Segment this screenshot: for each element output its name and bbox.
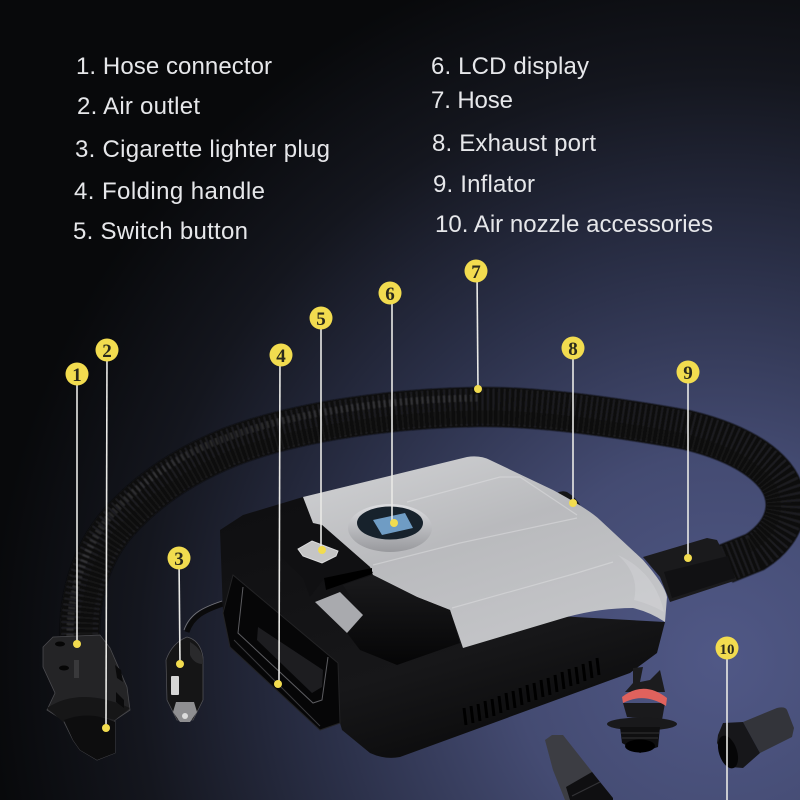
callout 8: exhaust port: 8: [568, 339, 578, 360]
callout 10: air nozzle accessories: [716, 636, 738, 800]
label 7: 7. Hose: [431, 87, 513, 114]
parts list: left column: [73, 53, 330, 245]
callout 7: hose: [464, 260, 488, 393]
label 4: 4. Folding handle: [74, 178, 265, 205]
callout 5: switch button: [310, 306, 332, 554]
accessory: tapered adapter: [714, 707, 794, 771]
silver top shell: [303, 456, 667, 648]
label 6: 6. LCD display: [431, 53, 589, 80]
black casing: [220, 497, 665, 758]
callout 3: cigarette plug: [168, 546, 190, 668]
exhaust port: [557, 491, 583, 518]
vent slots: [464, 658, 599, 725]
callout 8: exhaust port: [562, 336, 584, 507]
label 1: 1. Hose connector: [76, 53, 272, 80]
LCD dial: [348, 504, 432, 552]
accessory: cone nozzle: [545, 735, 613, 800]
corrugated hose: [70, 398, 786, 640]
folding handle: [223, 575, 340, 730]
parts list: right column: [431, 53, 713, 238]
front corner black cap: [343, 575, 460, 665]
callout 3: cigarette plug: 3: [174, 549, 184, 570]
callout 7: hose: 7: [471, 262, 481, 283]
callout 6: LCD display: 6: [385, 284, 395, 305]
callout 6: LCD display: [378, 282, 402, 527]
shell crease lines: [373, 477, 613, 608]
callout 4: folding handle: 4: [276, 346, 286, 367]
black switch panel: [267, 525, 373, 597]
label 9: 9. Inflator: [433, 171, 535, 198]
accessory: red ring valve nozzle: [607, 667, 677, 753]
outlet sleeve: [643, 538, 737, 602]
callout 9: inflator: [676, 360, 700, 562]
hose connector: [43, 635, 130, 760]
label 8: 8. Exhaust port: [432, 130, 596, 157]
switch button: [298, 541, 338, 563]
label 5: 5. Switch button: [73, 218, 248, 245]
silver slide latch: [315, 592, 363, 633]
label 3: 3. Cigarette lighter plug: [75, 136, 330, 163]
label 2: 2. Air outlet: [77, 93, 200, 120]
label 10: 10. Air nozzle accessories: [435, 211, 713, 238]
inflator body: [220, 456, 737, 758]
callout 2: air outlet: 2: [102, 341, 112, 362]
callout 1: hose connector: [66, 362, 88, 648]
callout 2: air outlet: [96, 338, 118, 732]
callout 4: folding handle: [270, 344, 292, 688]
callout 10: air nozzle accessories: 10: [720, 642, 734, 658]
callout 9: inflator: 9: [683, 363, 693, 384]
callout 1: hose connector: 1: [72, 365, 82, 386]
cigarette lighter plug: [166, 601, 223, 722]
callout 5: switch button: 5: [316, 309, 326, 330]
